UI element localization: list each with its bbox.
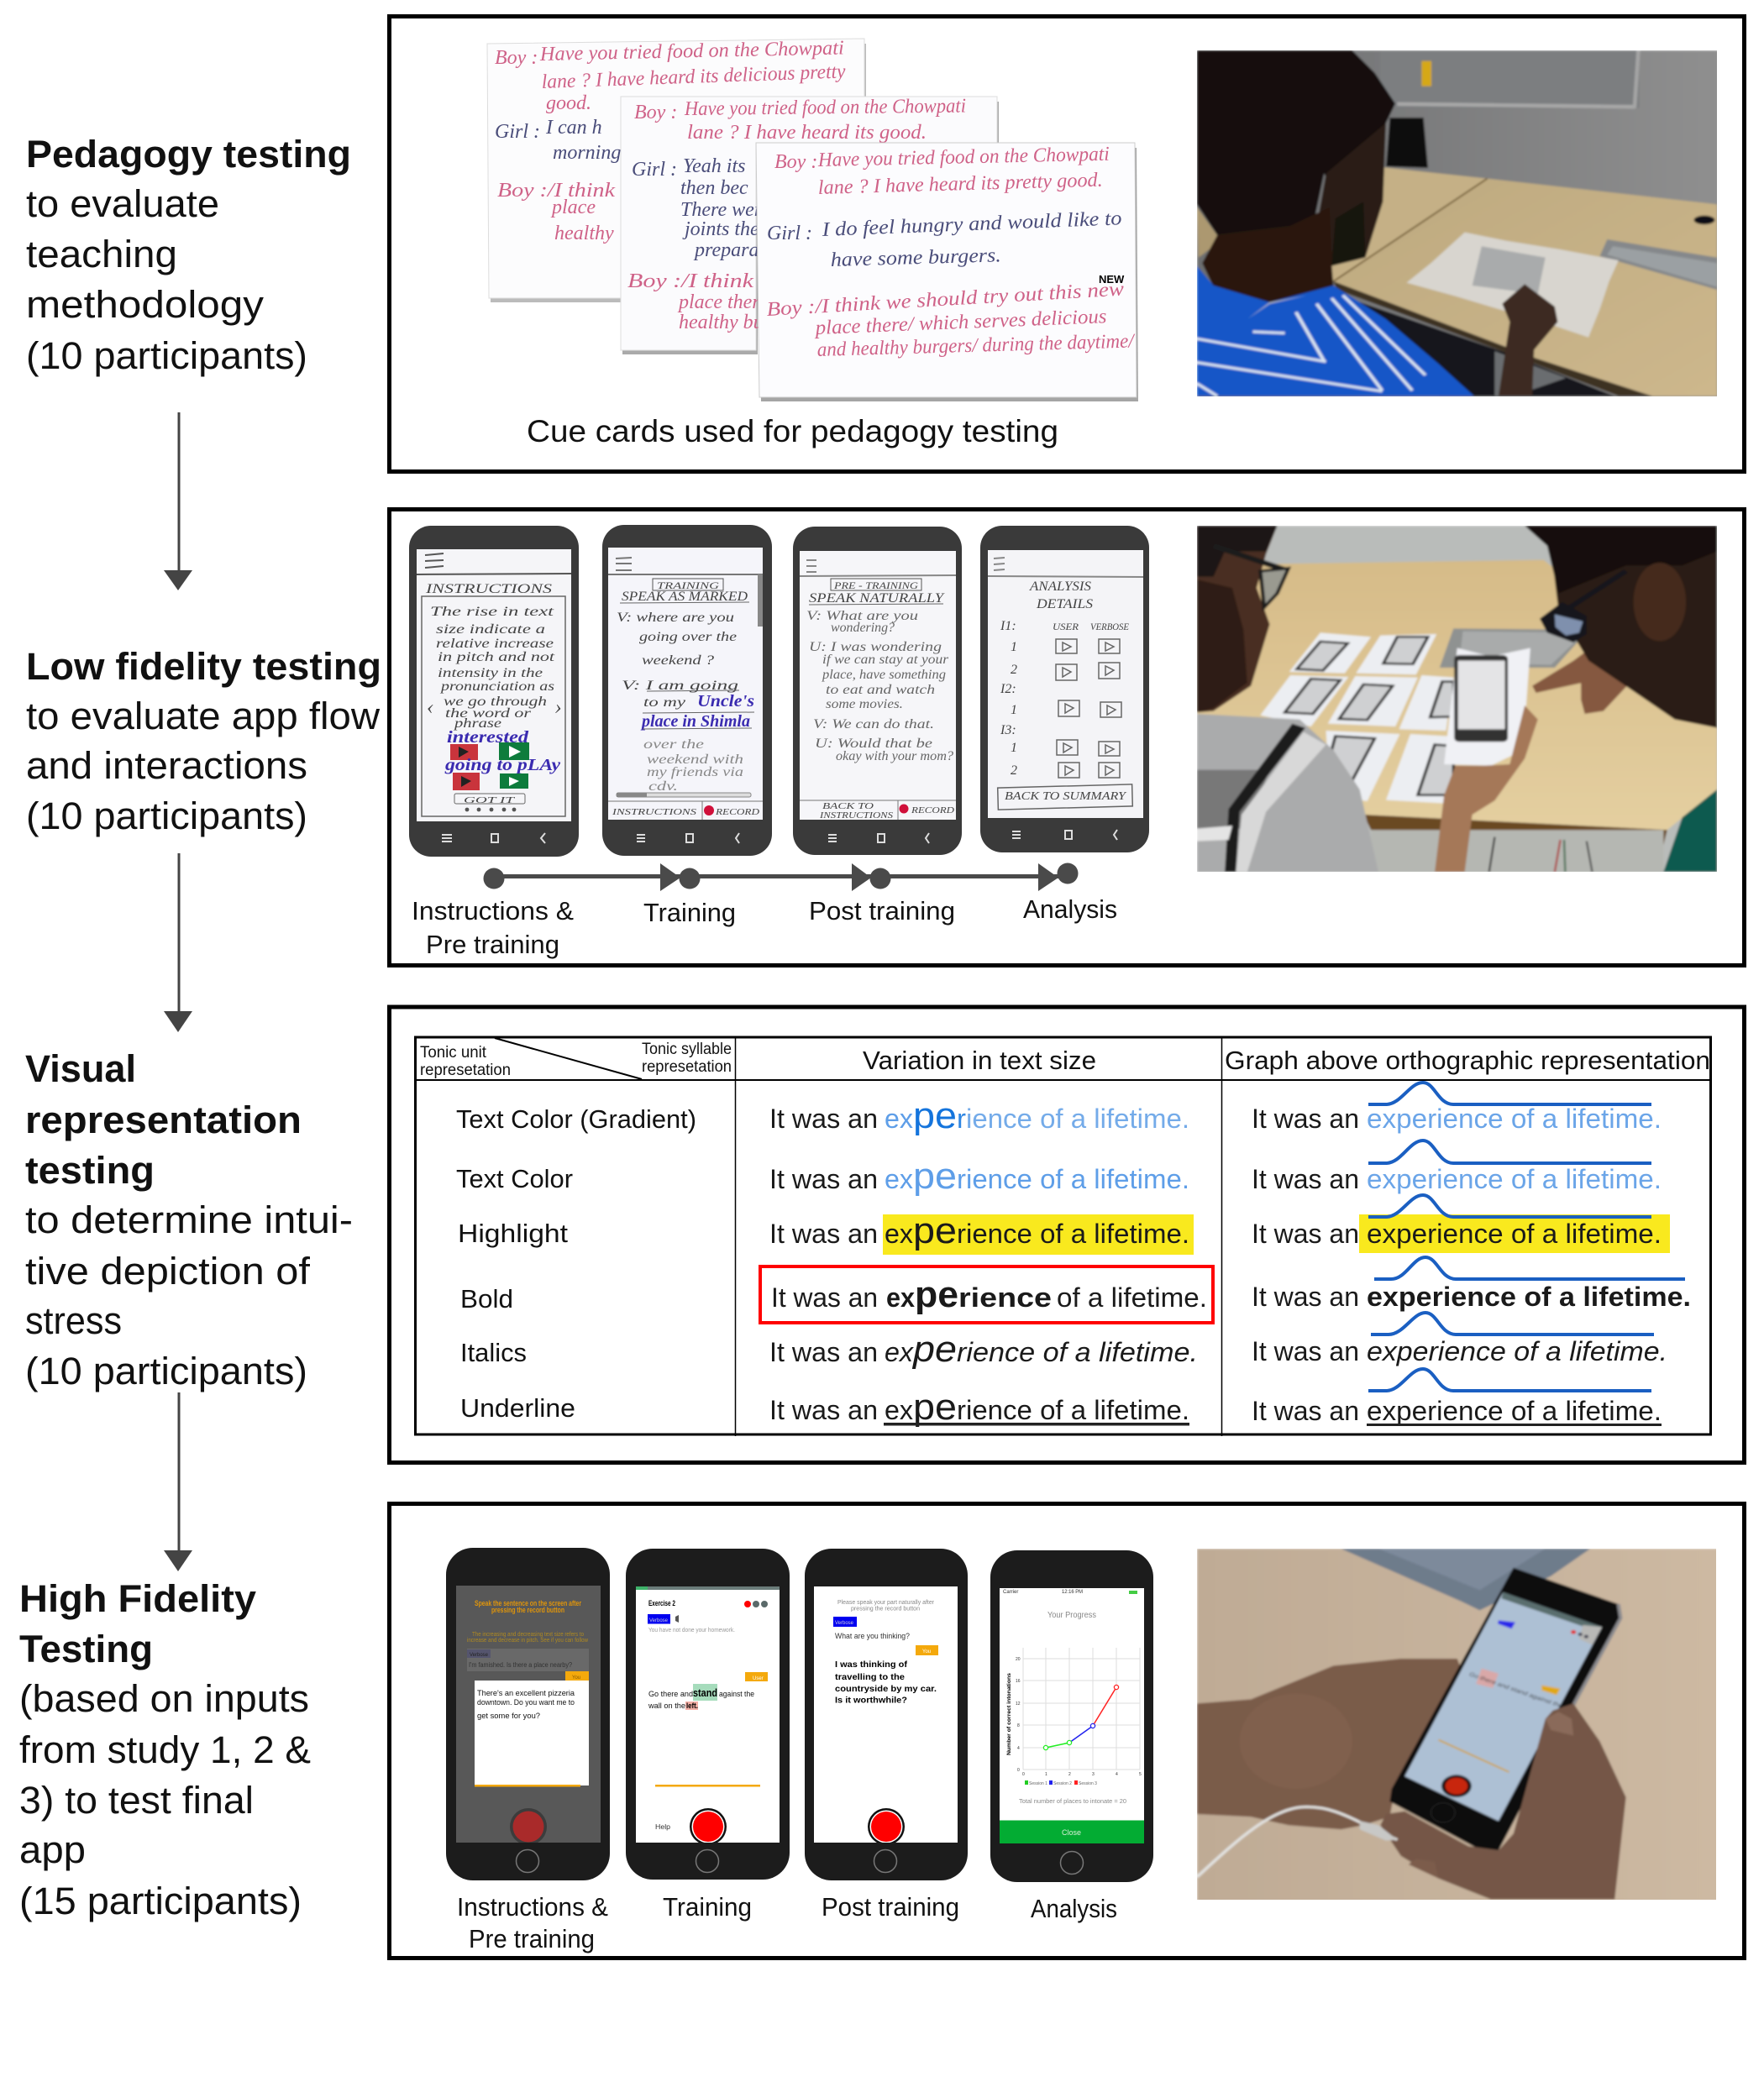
cue card 3: Girl : xyxy=(767,223,812,244)
cue card 1: I can h xyxy=(545,117,602,139)
sketch phone: training: INSTRUCTIONS xyxy=(612,807,697,817)
graph version: text color: experience of a lifetime. xyxy=(1367,1164,1662,1194)
sketch phone: training: RECORD xyxy=(715,807,759,817)
sketch phone: instructions: size indicate a xyxy=(436,622,545,637)
app phone: analysis: 12:16 PM xyxy=(1062,1590,1083,1595)
cue card 3: have some burgers. xyxy=(830,244,1001,271)
app phone: post training: countryside by my car. xyxy=(835,1685,937,1694)
progress line chart: Session 3 xyxy=(1079,1781,1097,1786)
table header xyxy=(420,1041,1710,1079)
sketch phone: analysis: VERBOSE xyxy=(1090,621,1130,632)
size variation: bold, selected: pe xyxy=(915,1274,958,1315)
size variation: gradient: r xyxy=(957,1104,966,1134)
size variation: italics: rience of a lifetime. xyxy=(957,1337,1198,1367)
row labels: Text Color (Gradient) xyxy=(456,1104,696,1134)
size variation: italics xyxy=(769,1329,1198,1370)
progress line chart: 1 xyxy=(1045,1772,1047,1777)
size variation: text color: It was an xyxy=(769,1164,878,1194)
cue card 1: place xyxy=(550,197,596,218)
cue card 1: Boy : xyxy=(495,47,538,69)
progress line chart: Session 1 xyxy=(1029,1781,1047,1786)
app phone: instructions xyxy=(446,1548,610,1880)
stage text: visual representation testing: to determine intui- xyxy=(25,1198,353,1241)
sketch phone: post training: PRE - TRAINING xyxy=(833,579,918,591)
size variation: italics: It was an xyxy=(769,1337,878,1367)
sketch phone: instructions: The rise in text xyxy=(430,605,554,619)
stage text: pedagogy testing: (10 participants) xyxy=(26,334,307,377)
size variation: text color: rience of a lifetime. xyxy=(957,1164,1189,1194)
sketch phone: post training: okay with your mom? xyxy=(836,749,953,763)
stage text: visual representation testing: (10 participants) xyxy=(25,1350,307,1392)
sketch phone: post training: wondering? xyxy=(831,621,895,635)
graph version: italics: It was an xyxy=(1252,1336,1359,1366)
sketch phone: instructions xyxy=(409,526,579,857)
app phone: analysis: Carrier xyxy=(1003,1590,1018,1595)
progress line chart: 0 xyxy=(1022,1772,1025,1777)
stage text: visual representation testing xyxy=(25,1047,353,1392)
cue card 2: Boy :/I think xyxy=(627,270,753,292)
sketch phone: post training: to eat and watch xyxy=(826,683,935,697)
sketch phone: instructions: in pitch and not xyxy=(438,650,555,664)
cue card 2: Have you tried food on the Chowpati xyxy=(684,95,966,120)
sketch phone: training: to my xyxy=(643,695,686,710)
sketch phone: training: going over the xyxy=(639,630,737,644)
graph version: bold xyxy=(1252,1257,1691,1312)
graph version: bold: experience of a lifetime. xyxy=(1367,1282,1691,1312)
sketch phone: post training: U: I was wondering xyxy=(809,640,942,654)
sketch phone: post training: some movies. xyxy=(826,697,903,711)
photo: participant reading cue cards xyxy=(1197,50,1722,397)
size variation: gradient xyxy=(769,1095,1189,1136)
sketch phone: analysis: I1: xyxy=(1000,619,1016,633)
size variation: gradient: pe xyxy=(913,1095,957,1136)
sketch phone: analysis: 1 xyxy=(1011,741,1017,755)
sketch phone: post training: U: Would that be xyxy=(815,737,932,751)
cue card 1: morning xyxy=(553,142,621,164)
progress line chart: Number of correct intonations xyxy=(1006,1673,1012,1755)
sketch phone: instructions: intensity in the xyxy=(438,666,543,680)
cue card 1: healthy xyxy=(554,223,614,244)
graph version: italics: experience of a lifetime. xyxy=(1367,1336,1667,1366)
stage text: pedagogy testing: teaching xyxy=(26,233,177,275)
graph version: underline: experience of a lifetime. xyxy=(1367,1396,1662,1426)
stage text: visual representation testing: tive depiction of xyxy=(25,1250,311,1293)
flow timeline xyxy=(484,863,1079,891)
size variation: highlight: rience of a lifetime. xyxy=(957,1219,1189,1249)
sketch phone: instructions: relative increase xyxy=(436,637,554,651)
size variation: underline: It was an xyxy=(769,1395,878,1425)
sketch phone: post training xyxy=(793,527,962,855)
app phone: training: Go there and xyxy=(648,1690,693,1698)
app phone: instructions: Speak the sentence on the screen after xyxy=(475,1599,581,1607)
sketch phone: analysis xyxy=(980,526,1149,852)
cue card 2 xyxy=(621,95,999,354)
photo: participants reviewing paper prototypes xyxy=(1197,526,1722,873)
table header: Graph above orthographic representation xyxy=(1225,1046,1710,1075)
cue card 1: Boy :/I think xyxy=(497,180,615,202)
progress line chart: 3 xyxy=(1092,1772,1095,1777)
stage text: high fidelity testing: 3) to test final xyxy=(19,1779,254,1822)
cue card 3: Have you tried food on the Chowpati xyxy=(817,144,1110,171)
app phone: training: Verbose xyxy=(649,1618,669,1623)
cue card 3 xyxy=(756,143,1138,401)
app flow labels: Instructions & xyxy=(457,1892,608,1922)
sketch phone: instructions: we go through xyxy=(444,695,547,709)
app phone: post training: You xyxy=(922,1649,931,1654)
flow labels: Analysis xyxy=(1023,894,1117,924)
app phone: analysis: Your Progress xyxy=(1047,1611,1096,1620)
sketch phone: post training: RECORD xyxy=(911,805,954,815)
table header: Tonic syllable xyxy=(642,1041,732,1058)
sketch phone: instructions: going to pLAy xyxy=(444,756,560,774)
stage text: high fidelity testing: Testing xyxy=(19,1628,153,1670)
app phone: training: against the xyxy=(719,1690,754,1698)
cue card 3: Boy : xyxy=(774,151,817,173)
sketch phone: instructions: ‹ xyxy=(427,695,434,719)
stage text: high fidelity testing: from study 1, 2 & xyxy=(19,1728,311,1771)
sketch phone: training: V: I am going xyxy=(622,679,738,693)
app phone: instructions: increase and decrease in pitch. See if you can follow xyxy=(467,1638,589,1644)
sketch phone: analysis: USER xyxy=(1053,621,1079,632)
cue card 1: Have you tried food on the Chowpati xyxy=(539,37,844,66)
panel: low fidelity testing xyxy=(390,509,1744,966)
size variation: underline: pe xyxy=(913,1387,957,1428)
progress line chart: 2 xyxy=(1068,1772,1071,1777)
app phone: post training: travelling to the xyxy=(835,1673,905,1682)
stage text: low fidelity testing: Low fidelity testing xyxy=(26,645,381,688)
sketch phone: training: place in Shimla xyxy=(640,712,750,731)
flow labels xyxy=(412,894,1117,959)
sketch phone: training: TRAINING xyxy=(657,579,719,591)
size variation: underline xyxy=(769,1387,1189,1428)
cue card 3: I do feel hungry and would like to xyxy=(821,207,1122,241)
sketch phone: analysis: 2 xyxy=(1011,663,1017,677)
size variation: highlight xyxy=(769,1210,1194,1255)
app phone: instructions: There's an excellent pizzeria xyxy=(477,1689,575,1697)
progress line chart: Session 2 xyxy=(1053,1781,1072,1786)
cue card 2: then bec xyxy=(680,177,748,199)
progress line chart: 0 xyxy=(1017,1768,1020,1773)
cue card 2: preparati xyxy=(693,239,770,261)
table header: Variation in text size xyxy=(863,1046,1096,1075)
sketch phone: analysis: ANALYSIS xyxy=(1029,579,1091,594)
sketch phone: training: V: where are you xyxy=(617,611,734,625)
app flow labels: Training xyxy=(663,1892,752,1922)
size variation: bold, selected: It was an xyxy=(771,1282,878,1313)
size variation: italics: pe xyxy=(911,1329,957,1370)
row labels: Text Color xyxy=(456,1164,573,1193)
flow labels: Instructions & xyxy=(412,896,574,926)
app flow labels xyxy=(457,1892,1117,1953)
size variation: highlight: pe xyxy=(913,1210,957,1251)
cue card 2: Boy : xyxy=(634,102,677,123)
flow labels: Pre training xyxy=(426,930,559,959)
app phone: training: left. xyxy=(686,1702,698,1710)
stage text: pedagogy testing: methodology xyxy=(26,283,265,326)
flow labels: Training xyxy=(643,898,736,927)
app phone: instructions: The increasing and decreasing text size refers to xyxy=(472,1632,584,1638)
graph version: italics xyxy=(1252,1313,1667,1366)
panel: pedagogy testing xyxy=(390,17,1744,472)
sketch phone: post training: SPEAK NATURALLY xyxy=(809,591,945,606)
row labels: Bold xyxy=(460,1284,513,1314)
app phone: post training: Please speak your part naturally after xyxy=(837,1600,935,1606)
sketch phone: post training: BACK TO xyxy=(822,801,874,811)
app phone: post training: Is it worthwhile? xyxy=(835,1696,907,1705)
app phone: training xyxy=(626,1549,790,1880)
progress line chart: 4 xyxy=(1116,1772,1118,1777)
caption: cue cards: Cue cards used for pedagogy testing xyxy=(527,414,1058,448)
size variation: highlight: ex xyxy=(885,1219,913,1249)
sketch phone: instructions: interested xyxy=(447,728,529,747)
sketch phone: training: weekend ? xyxy=(642,653,714,668)
sketch phone: training: cdv. xyxy=(648,779,678,794)
graph version: gradient: experience of a lifetime. xyxy=(1367,1104,1662,1134)
size variation: italics: ex xyxy=(885,1337,914,1367)
app phone: instructions: downtown. Do you want me to xyxy=(477,1698,575,1707)
app phone: training: Exercise 2 xyxy=(648,1599,675,1607)
size variation: underline: ex xyxy=(885,1395,913,1425)
table grid xyxy=(415,1037,1710,1436)
graph version: gradient xyxy=(1252,1083,1662,1134)
app phone: instructions: I'm famished. Is there a place nearby? xyxy=(469,1661,573,1669)
sketch phone: training xyxy=(602,525,772,856)
row labels: Italics xyxy=(460,1338,527,1367)
sketch phone: analysis: BACK TO SUMMARY xyxy=(1005,790,1128,803)
sketch phone: post training: if we can stay at your xyxy=(822,653,949,667)
sketch phone: instructions: pronunciation as xyxy=(440,679,554,694)
cue card 3: place there/ which serves delicious xyxy=(813,306,1107,339)
stage text: visual representation testing: stress xyxy=(25,1299,122,1342)
sketch phone: training: weekend with xyxy=(647,752,743,767)
graph version: underline: It was an xyxy=(1252,1396,1359,1426)
photo: hands using final app xyxy=(1197,1549,1722,1901)
size variation: bold, selected: ex xyxy=(886,1282,915,1313)
app phone: post training xyxy=(805,1549,968,1880)
graph version: gradient: It was an xyxy=(1252,1104,1359,1134)
cue card 3: Boy :/I think we should try out this new xyxy=(766,279,1125,321)
table header: represetation xyxy=(642,1058,732,1076)
progress line chart: 5 xyxy=(1139,1772,1142,1777)
sketch phone: training: over the xyxy=(643,737,704,752)
graph version: highlight xyxy=(1252,1195,1670,1253)
app flow labels: Pre training xyxy=(469,1924,595,1953)
sketch phone: training: SPEAK AS MARKED xyxy=(622,590,748,604)
stage text: low fidelity testing: to evaluate app flow xyxy=(26,695,381,737)
cue card 1: Girl : xyxy=(495,121,540,143)
sketch phone: training: my friends via xyxy=(647,765,743,779)
photo: hands using final app: Go there and stand against the xyxy=(1467,1671,1565,1709)
app phone: post training: What are you thinking? xyxy=(835,1632,910,1640)
graph version: text color xyxy=(1252,1141,1662,1194)
stage text: pedagogy testing xyxy=(26,133,351,377)
sketch phone: analysis: I3: xyxy=(1000,723,1016,737)
comparison table xyxy=(415,1037,1710,1436)
cue card 3: lane ? I have heard its pretty good. xyxy=(817,170,1103,199)
cue card 2: Yeah its xyxy=(683,155,745,177)
app phone: instructions: get some for you? xyxy=(477,1712,540,1720)
stage text: pedagogy testing: to evaluate xyxy=(26,182,219,225)
graph version: text color: It was an xyxy=(1252,1164,1359,1194)
app flow labels: Post training xyxy=(822,1892,959,1922)
size variation: text color: pe xyxy=(913,1156,957,1197)
progress line chart: 4 xyxy=(1017,1746,1020,1751)
stage text: pedagogy testing: Pedagogy testing xyxy=(26,133,351,176)
app phone: instructions: pressing the record button xyxy=(491,1606,564,1614)
app phone: post training: pressing the record button xyxy=(851,1606,920,1612)
app flow labels: Analysis xyxy=(1031,1894,1117,1923)
table header: Tonic unit xyxy=(420,1044,487,1062)
cue card 2: lane ? I have heard its good. xyxy=(687,122,927,144)
progress line chart xyxy=(1006,1648,1142,1786)
cue card 2: There were xyxy=(680,199,770,221)
stage text: high fidelity testing: High Fidelity xyxy=(19,1577,256,1620)
graph version: highlight: experience of a lifetime. xyxy=(1367,1219,1662,1249)
sketch phone: instructions: the word or xyxy=(445,706,532,721)
table header: represetation xyxy=(420,1062,511,1079)
size variation: underline: rience of a lifetime. xyxy=(957,1395,1189,1425)
cue card 2: place there xyxy=(677,291,769,313)
arrow: low fidelity to visual representation xyxy=(164,853,192,1032)
sketch phone: post training: INSTRUCTIONS xyxy=(819,810,894,821)
app phone: post training: I was thinking of xyxy=(835,1660,908,1670)
size variation: bold, selected xyxy=(760,1266,1213,1323)
cue card 1: good. xyxy=(546,92,591,114)
sketch phone: analysis: 2 xyxy=(1011,763,1017,778)
stage text: visual representation testing: representation xyxy=(25,1099,302,1141)
size variation: gradient: ex xyxy=(885,1104,913,1134)
app phone: analysis: Total number of places to intonate = 20 xyxy=(1019,1797,1126,1805)
progress line chart: 8 xyxy=(1017,1723,1020,1728)
graph version: highlight: It was an xyxy=(1252,1219,1359,1249)
app phone: instructions: You xyxy=(572,1675,580,1681)
stage text: high fidelity testing: (15 participants) xyxy=(19,1880,302,1922)
app phone: instructions: Verbose xyxy=(470,1653,489,1658)
cue card 2: joints the xyxy=(682,218,759,240)
size variation: gradient: ience of a lifetime. xyxy=(966,1104,1189,1134)
app phone: training: You have not done your homework. xyxy=(648,1628,735,1633)
size variation: gradient: It was an xyxy=(769,1104,878,1134)
sketch phone: analysis: DETAILS xyxy=(1036,597,1093,611)
stage text: low fidelity testing: and interactions xyxy=(26,744,307,787)
arrow: pedagogy to low fidelity xyxy=(164,412,192,590)
size variation: text color xyxy=(769,1156,1189,1197)
app phone: post training: Verbose xyxy=(835,1621,854,1626)
arrow: visual representation to high fidelity xyxy=(164,1392,192,1571)
stage text: visual representation testing: Visual xyxy=(25,1047,136,1090)
cue card 3: NEW xyxy=(1099,273,1125,286)
app phone: training: stand xyxy=(693,1686,717,1699)
app phone: analysis: Close xyxy=(1062,1828,1081,1837)
sketch phone: instructions: › xyxy=(554,695,562,719)
panel: high fidelity testing xyxy=(390,1503,1744,1959)
sketch phone: analysis: 1 xyxy=(1011,703,1017,717)
row labels: Highlight xyxy=(458,1219,568,1248)
stage text: high fidelity testing: (based on inputs xyxy=(19,1677,309,1720)
graph version: bold: It was an xyxy=(1252,1282,1359,1312)
stage text: visual representation testing: testing xyxy=(25,1149,155,1192)
stage text: low fidelity testing xyxy=(26,645,381,837)
cue card 3: and healthy burgers/ during the daytime/ xyxy=(816,330,1136,361)
sketch phone: analysis: 1 xyxy=(1011,640,1017,654)
sketch phone: analysis: I2: xyxy=(1000,682,1016,696)
flow labels: Post training xyxy=(809,896,955,926)
size variation: bold, selected: of a lifetime. xyxy=(1057,1282,1207,1313)
progress line chart: 16 xyxy=(1016,1679,1021,1684)
sketch phone: post training: place, have something xyxy=(822,668,946,682)
cue card 2: healthy bu xyxy=(679,312,764,333)
app phone: analysis xyxy=(990,1550,1153,1882)
sketch phone: instructions: INSTRUCTIONS xyxy=(425,582,552,596)
stage text: high fidelity testing: app xyxy=(19,1828,86,1871)
sketch phone: instructions: GOT IT xyxy=(464,795,516,805)
cue card 1 xyxy=(487,37,866,302)
sketch phone: post training: V: What are you xyxy=(806,609,918,623)
size variation: text color: ex xyxy=(885,1164,913,1194)
app phone: training: wall on the xyxy=(648,1702,685,1710)
stage text: low fidelity testing: (10 participants) xyxy=(26,794,307,837)
size variation: bold, selected: rience xyxy=(958,1282,1052,1313)
app phone: training: Help xyxy=(655,1823,671,1831)
size variation: highlight: It was an xyxy=(769,1219,878,1249)
sketch phone: post training: V: We can do that. xyxy=(813,717,934,731)
graph version: underline xyxy=(1252,1369,1662,1426)
app phone: training: User xyxy=(753,1676,764,1681)
row labels xyxy=(456,1104,696,1423)
progress line chart: 12 xyxy=(1016,1702,1021,1707)
cue card 1: lane ? I have heard its delicious pretty xyxy=(541,60,846,93)
panel: visual representation testing xyxy=(390,1007,1744,1463)
sketch phone: training: Uncle's xyxy=(697,692,754,711)
progress line chart: 20 xyxy=(1016,1657,1021,1662)
stage text: high fidelity testing xyxy=(19,1577,311,1922)
row labels: Underline xyxy=(460,1393,575,1423)
sketch phone: instructions: phrase xyxy=(454,716,501,731)
cue card 2: Girl : xyxy=(632,159,677,181)
